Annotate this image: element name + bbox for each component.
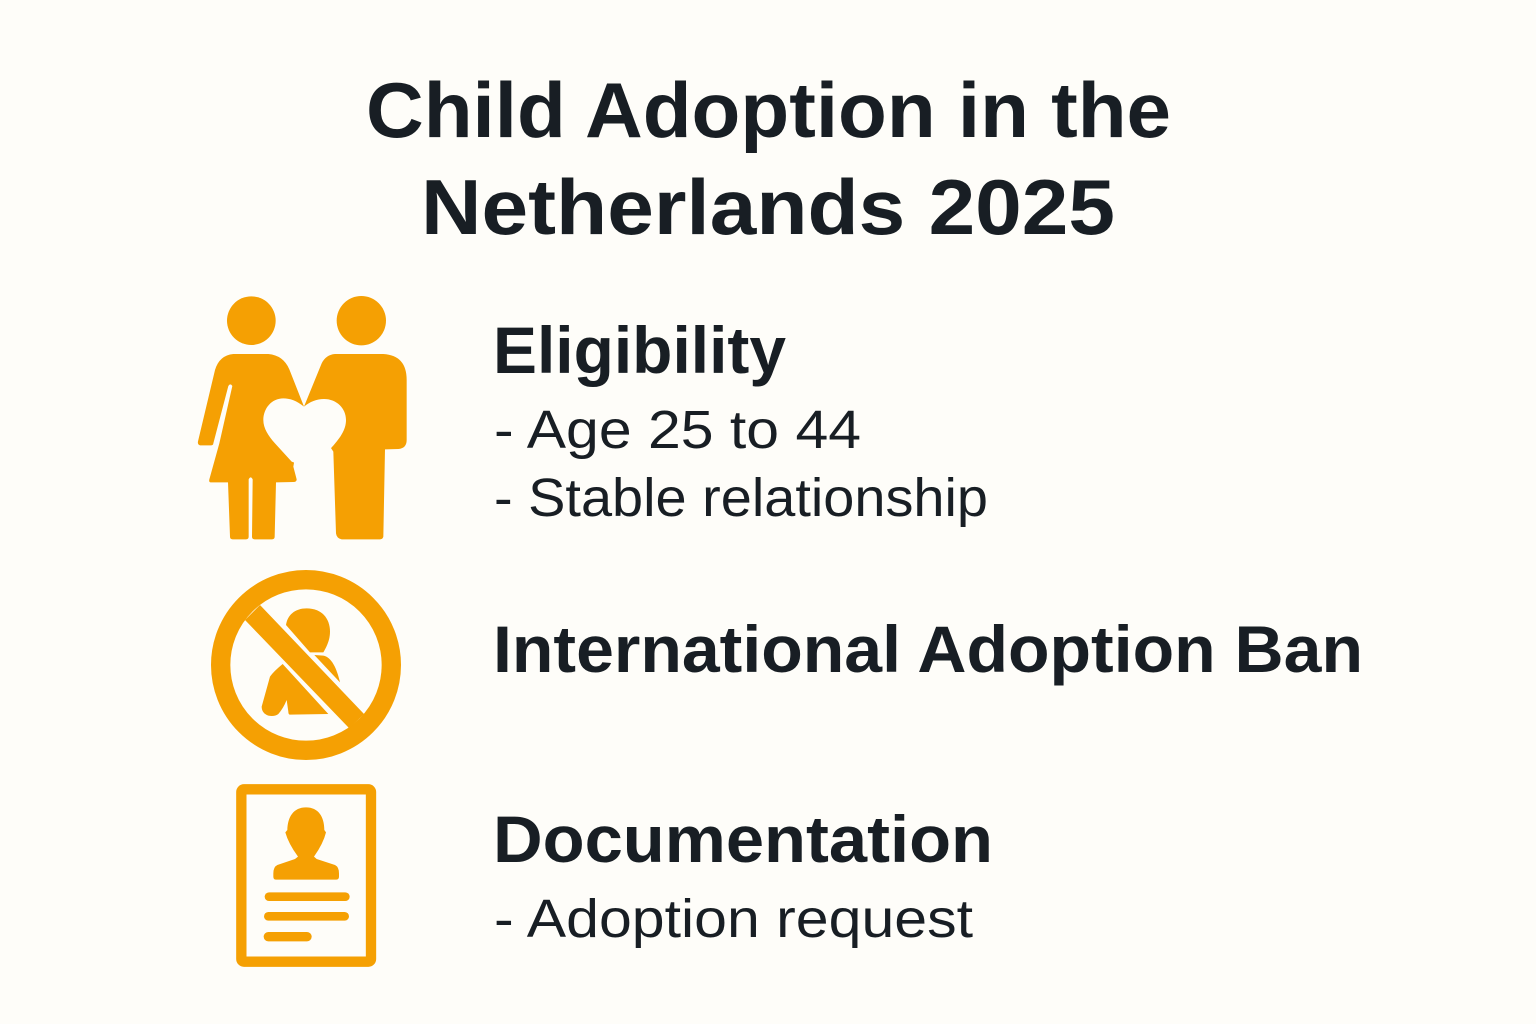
title: Netherlands 2025 [421, 163, 1115, 251]
text: adoption request: - Adoption request [494, 889, 973, 949]
title [366, 66, 1171, 251]
title: Child Adoption in the [366, 66, 1171, 154]
icon: prohibited child [221, 580, 391, 750]
heading: eligibility: Eligibility [493, 313, 786, 387]
icon: document with profile [241, 789, 371, 962]
text: relationship requirement: - Stable relationship [494, 468, 988, 528]
heading: documentation: Documentation [493, 802, 993, 876]
icon: couple with heart [198, 296, 407, 539]
text: age requirement: - Age 25 to 44 [494, 400, 861, 460]
heading: international adoption ban: International Adoption Ban [493, 612, 1363, 686]
